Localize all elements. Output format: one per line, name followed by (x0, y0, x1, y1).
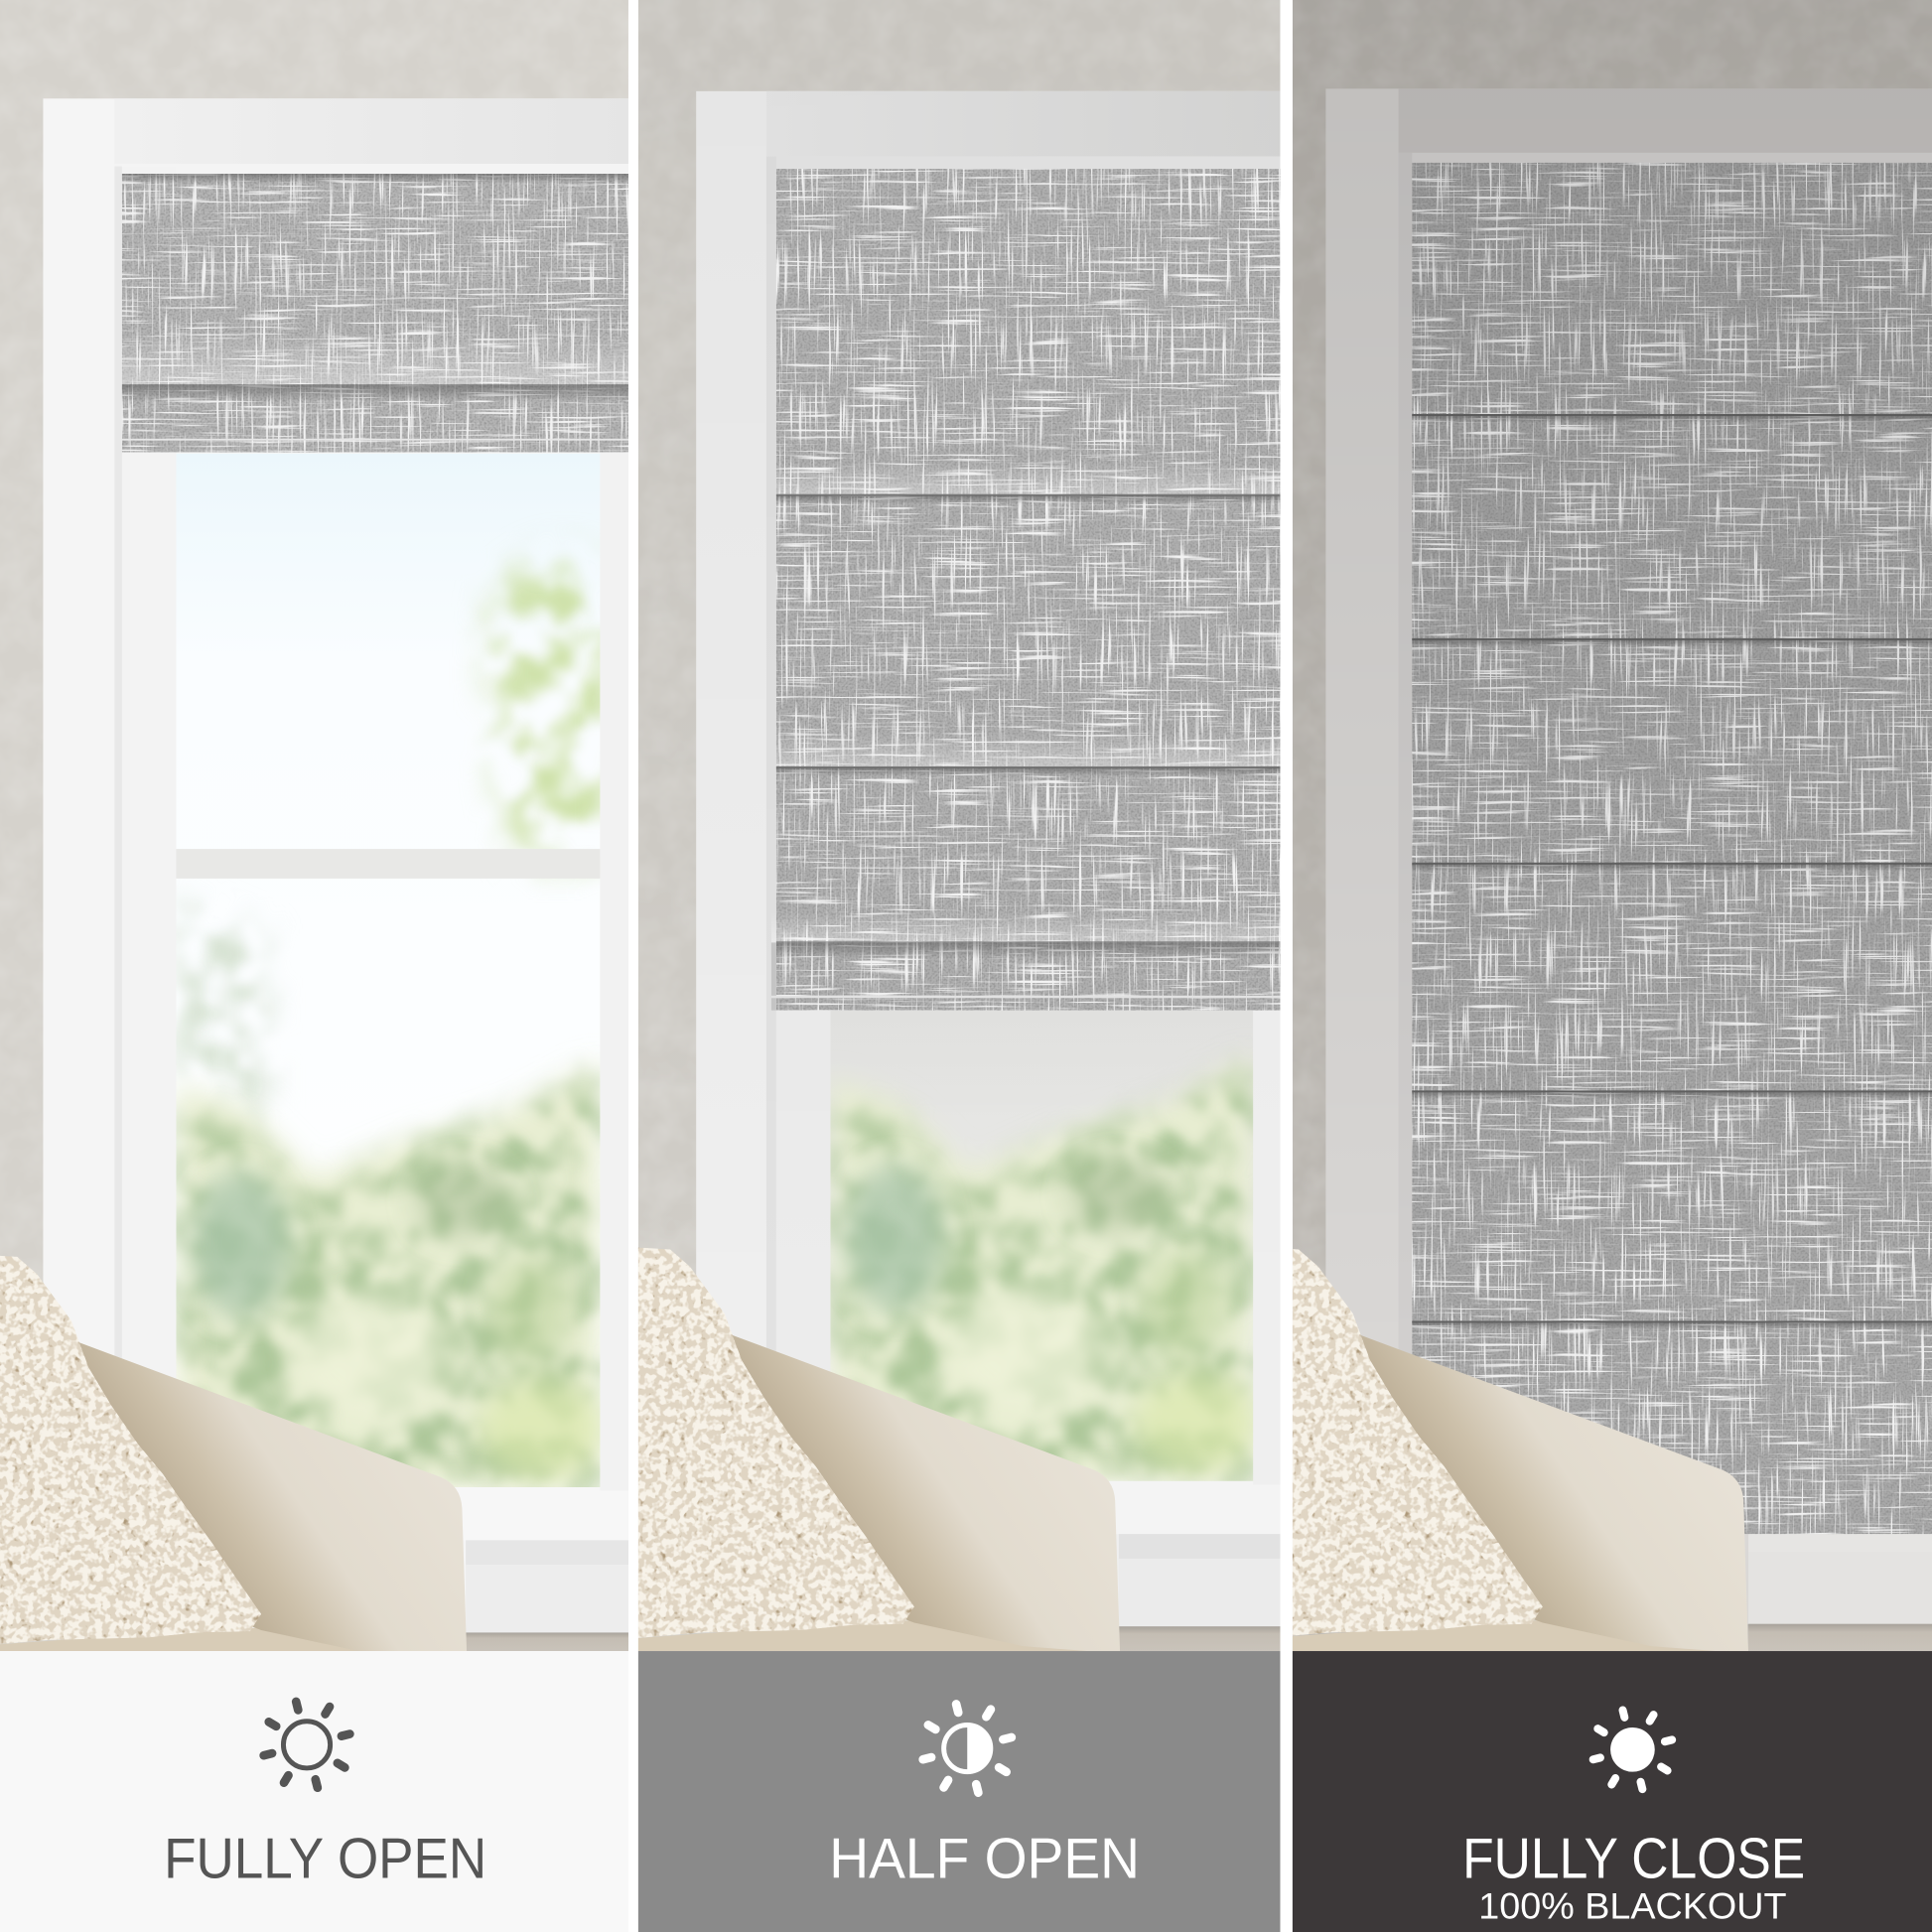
seat: pillow and armchair (0, 1254, 467, 1661)
roman shade half lowered (771, 169, 1280, 1011)
icon: half-filled sun (923, 1705, 1012, 1793)
photo: window with shade half lowered (628, 0, 1280, 1654)
wall (1293, 0, 1932, 1651)
window view: sky and trees (176, 454, 617, 1491)
window trim (1325, 88, 1932, 1651)
photo: window with shade raised (0, 0, 628, 1661)
panel: fully close (1257, 0, 1932, 1932)
caption band: half open (638, 1651, 1280, 1932)
wall (0, 0, 628, 1651)
icon: filled sun (1593, 1711, 1672, 1789)
photo: window with shade fully lowered (1257, 0, 1932, 1654)
roman shade fully lowered (1412, 163, 1932, 1534)
seat: pillow and armchair (628, 1247, 1120, 1654)
caption band: fully close (1293, 1651, 1932, 1932)
shading overlay (647, 0, 1280, 147)
label: 100% blackout: 100% BLACKOUT (1478, 1884, 1787, 1926)
label: fully close: FULLY CLOSE (1462, 1827, 1805, 1890)
roman shade raised (122, 174, 628, 452)
icon: sun outline (264, 1702, 349, 1788)
window meeting rail (176, 849, 600, 879)
caption band: fully open (0, 1651, 628, 1932)
wall (638, 0, 1280, 1651)
shading overlay (1293, 0, 1932, 1651)
label: fully open: FULLY OPEN (164, 1827, 486, 1890)
window trim (43, 98, 628, 1651)
window view: sky and trees (830, 1011, 1258, 1484)
window trim (696, 91, 1280, 1651)
panel: fully open (0, 0, 628, 1932)
panel: half open (628, 0, 1280, 1932)
seat: pillow and armchair (1257, 1247, 1748, 1654)
label: half open: HALF OPEN (829, 1827, 1140, 1890)
